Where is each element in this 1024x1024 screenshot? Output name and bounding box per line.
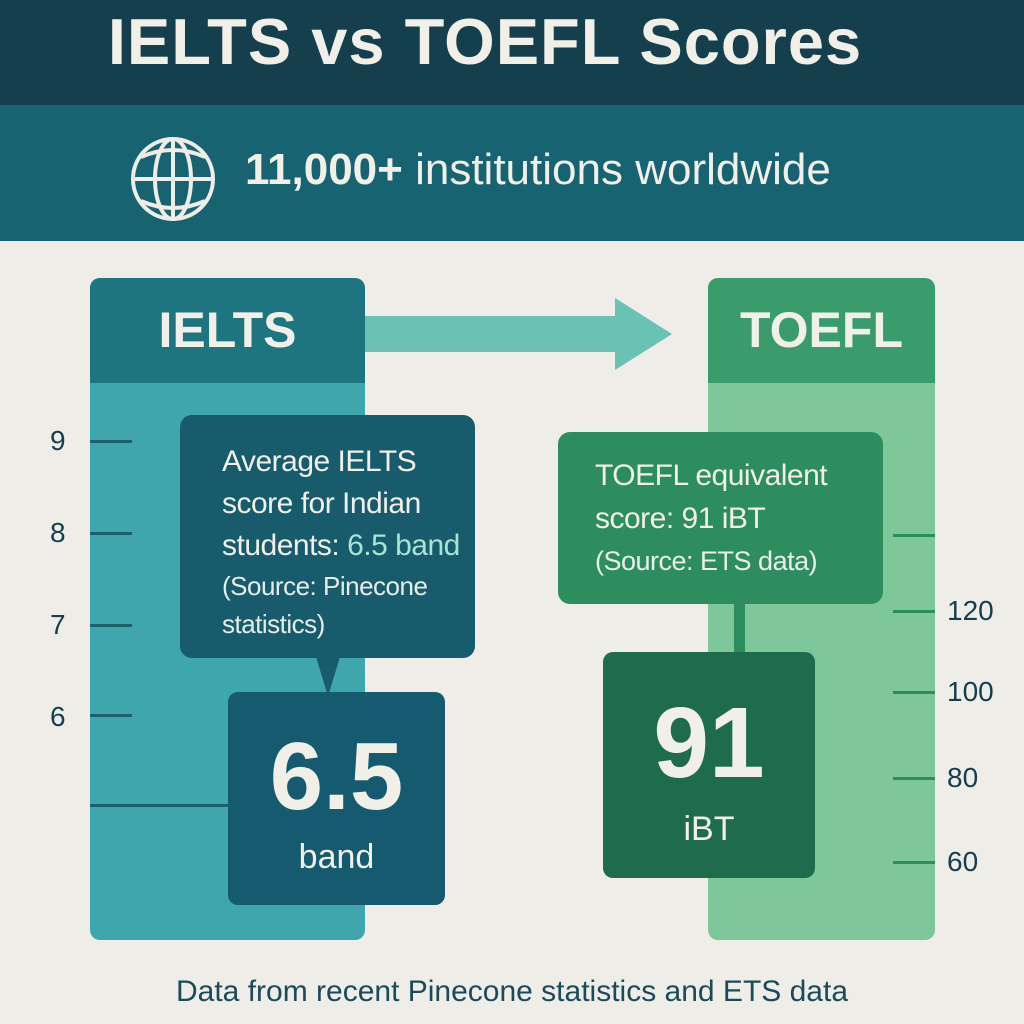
TOEFL scale: 100 [947, 676, 994, 707]
title: IELTS vs TOEFL Scores [108, 5, 862, 78]
score box: 91 iBT: iBT [684, 810, 734, 848]
icon: globe [131, 137, 215, 221]
callout: IELTS average [180, 415, 475, 658]
callout: IELTS average: Average IELTS [222, 445, 416, 478]
footer note: Data from recent Pinecone statistics and ETS data [176, 975, 848, 1008]
callout: TOEFL equivalent: TOEFL equivalent [595, 459, 827, 492]
score box: 6.5 band: band [299, 838, 374, 876]
TOEFL heading [708, 278, 935, 383]
IELTS scale: 7 [50, 609, 66, 640]
IELTS heading [90, 278, 365, 383]
score box: 91 iBT [603, 652, 815, 878]
TOEFL scale [893, 534, 994, 877]
callout: IELTS average: students: 6.5 band [222, 529, 460, 562]
sub band [0, 105, 1024, 241]
score box: 6.5 band [228, 692, 445, 905]
IELTS scale: 9 [50, 425, 66, 456]
stat text: 11,000+ institutions worldwide [245, 145, 831, 194]
callout: IELTS average: statistics) [222, 609, 325, 639]
TOEFL scale: 60 [947, 846, 978, 877]
arrow [365, 298, 672, 370]
callout: TOEFL equivalent: score: 91 iBT [595, 502, 765, 535]
TOEFL scale: 80 [947, 762, 978, 793]
panel: TOEFL column [708, 278, 935, 940]
IELTS heading: IELTS [159, 302, 296, 358]
TOEFL scale: 120 [947, 595, 994, 626]
callout: TOEFL equivalent: (Source: ETS data) [595, 546, 817, 576]
panel: IELTS column [90, 278, 365, 940]
callout: IELTS average: score for Indian [222, 487, 421, 520]
IELTS scale: 8 [50, 517, 66, 548]
IELTS scale [50, 425, 228, 807]
callout: TOEFL equivalent [558, 432, 883, 604]
TOEFL heading: TOEFL [740, 302, 903, 358]
callout pointer [316, 658, 340, 692]
connector [734, 603, 745, 653]
header band [0, 0, 1024, 105]
callout: IELTS average: (Source: Pinecone [222, 571, 427, 601]
score box: 6.5 band: 6.5 [270, 723, 403, 830]
score box: 91 iBT: 91 [653, 687, 765, 799]
IELTS scale: 6 [50, 701, 66, 732]
